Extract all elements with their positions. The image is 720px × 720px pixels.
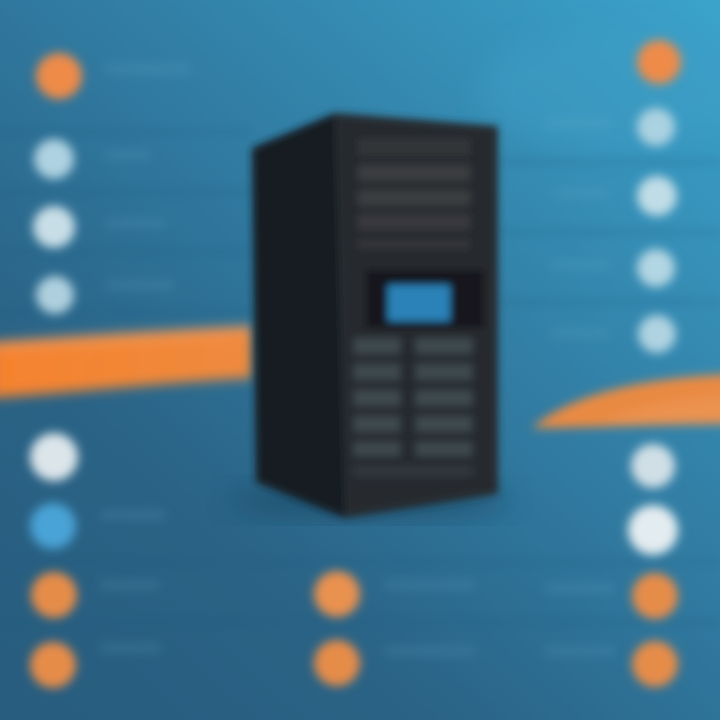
left column icons: [30, 53, 82, 688]
icon: orange dot: [31, 572, 77, 618]
icon: white dot: [30, 433, 78, 481]
icon: pale dot: [638, 315, 676, 353]
server lower keys: [354, 338, 472, 476]
centre column icons: [314, 571, 360, 686]
icon: orange dot: [637, 40, 681, 84]
icon: pale dot: [637, 108, 675, 146]
icon: orange dot: [314, 571, 360, 617]
icon: orange dot: [36, 53, 82, 99]
right orange swoosh: [532, 374, 720, 428]
left orange band: [0, 326, 252, 398]
icon: orange dot: [632, 641, 678, 687]
icon: white dot: [631, 444, 675, 488]
server top vents: [358, 138, 470, 250]
icon: pale dot: [637, 176, 677, 216]
icon: orange dot: [30, 642, 76, 688]
server side panel: [252, 113, 345, 518]
icon: pale dot: [637, 249, 675, 287]
icon: pale dot: [36, 276, 74, 314]
icon: orange dot: [314, 640, 360, 686]
icon: orange dot: [632, 573, 678, 619]
server shadow: [230, 484, 510, 516]
icon: pale dot: [33, 206, 75, 248]
server display: [366, 270, 484, 328]
right column icons: [628, 40, 681, 687]
icon: blue dot: [30, 503, 76, 549]
faint placeholder text lines: [100, 63, 615, 656]
icon: pale dot: [34, 139, 74, 179]
server tower: [252, 113, 498, 518]
server front panel: [335, 113, 498, 518]
faint background stripes: [0, 128, 720, 626]
icon: white dot: [628, 505, 678, 555]
